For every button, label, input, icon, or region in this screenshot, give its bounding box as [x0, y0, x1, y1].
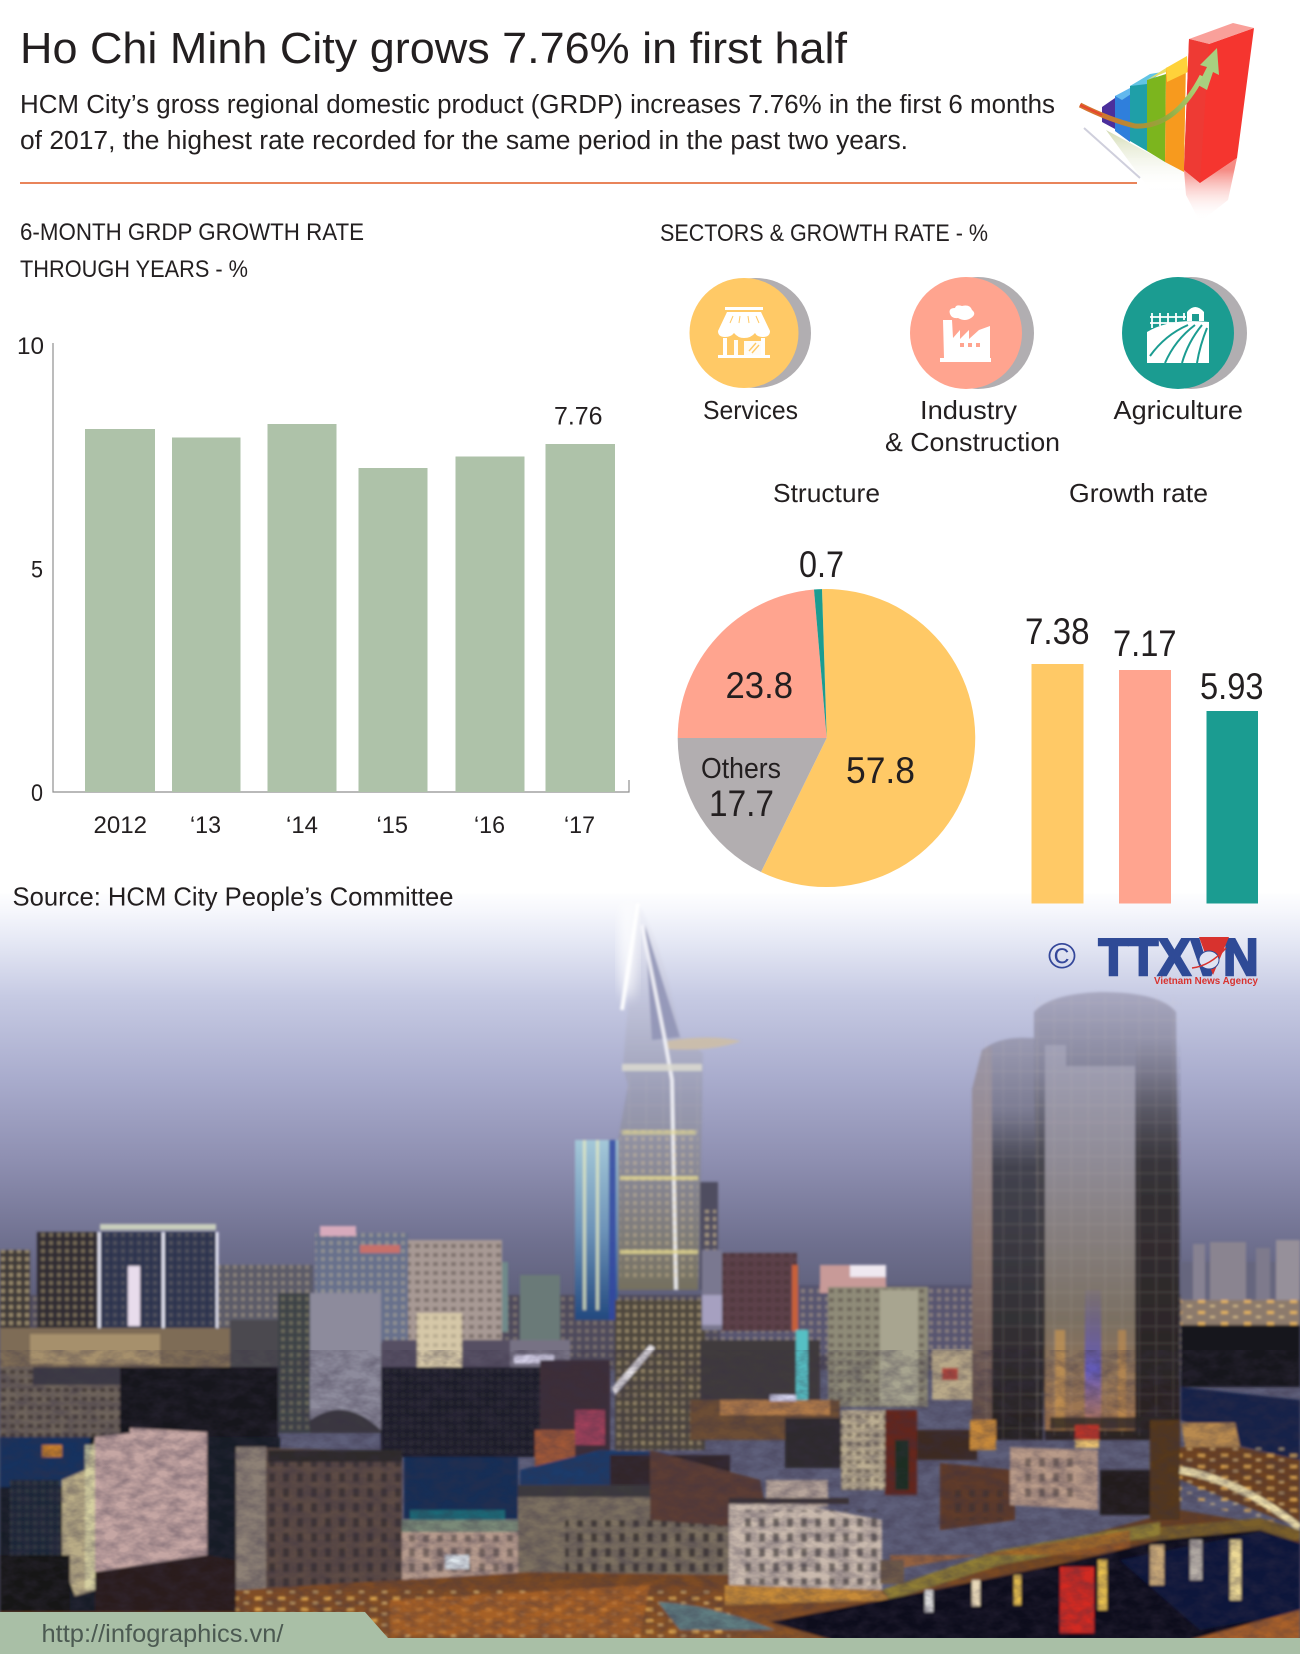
- growth values: [1025, 611, 1264, 707]
- footer url: http://infographics.vn/: [42, 1620, 284, 1648]
- white fade over photo top edge: [0, 880, 1300, 894]
- sector: agriculture: [1114, 277, 1247, 425]
- label: Industry: [920, 395, 1017, 425]
- pie labels: 57.8: [846, 750, 915, 791]
- intro text: of 2017, the highest rate recorded for the same period in the past two years.: [20, 127, 908, 155]
- pie labels: [701, 544, 915, 824]
- label: [885, 395, 1060, 457]
- logo: TTXVN copyright: Vietnam News Agency: [1154, 975, 1258, 987]
- x axis labels: ‘14: [286, 812, 318, 839]
- photo grain texture: [0, 1350, 1300, 1640]
- label: Agriculture: [1114, 395, 1243, 425]
- pie labels: Others: [701, 753, 781, 785]
- heading: GRDP growth rate: THROUGH YEARS - %: [20, 256, 248, 283]
- pie labels: 23.8: [726, 665, 793, 706]
- x axis labels: ‘13: [190, 812, 221, 839]
- x axis labels: ‘17: [564, 812, 595, 839]
- icon: shop: [690, 278, 811, 388]
- y axis labels: 10: [17, 333, 44, 360]
- pie labels: 17.7: [709, 783, 774, 824]
- back row left: [0, 1224, 560, 1370]
- x axis labels: [94, 812, 595, 839]
- x axis labels: ‘16: [474, 812, 505, 839]
- photo: Ho Chi Minh City skyline: [0, 885, 1300, 1645]
- y axis labels: 5: [31, 556, 43, 584]
- sector: industry and construction: [885, 277, 1060, 457]
- chart axes: [53, 343, 629, 792]
- heading: sectors and growth rate: SECTORS & GROWTH RATE - %: [660, 220, 988, 247]
- y axis labels: 0: [31, 780, 43, 807]
- subheading: growth rate: Growth rate: [1069, 478, 1208, 508]
- logo: TTXVN copyright: ©: [1048, 935, 1076, 976]
- bars: [85, 424, 615, 792]
- front-middle blocks: [0, 1250, 996, 1495]
- heading: GRDP growth rate: 6-MONTH GRDP GROWTH RATE: [20, 219, 364, 246]
- value label: 7.76: [554, 402, 602, 430]
- heading: GRDP growth rate: [20, 219, 364, 283]
- growth values: 7.38: [1025, 611, 1090, 652]
- icon: 3D rising bar chart: [1080, 23, 1254, 222]
- logo: TTXVN copyright: TTXVN: [1098, 929, 1258, 987]
- sector: services: [690, 278, 811, 425]
- intro text: HCM City’s gross regional domestic product (GRDP) increases 7.76% in the first 6 months: [20, 91, 1055, 119]
- x axis labels: ‘15: [376, 812, 408, 839]
- far city haze: [0, 1240, 1300, 1460]
- icon: farm: [1122, 277, 1247, 389]
- intro text: [20, 91, 1055, 155]
- bar chart: GRDP growth by year: [17, 333, 629, 839]
- source note: Source: HCM City People’s Committee: [12, 882, 454, 912]
- y axis labels: [17, 333, 44, 807]
- label: Services: [703, 395, 798, 425]
- label: & Construction: [885, 427, 1060, 457]
- lower city: [0, 1420, 1300, 1642]
- header divider: [20, 182, 1137, 184]
- spire glare: [620, 900, 636, 1000]
- blue glass tower: [575, 1140, 618, 1320]
- pie labels: 0.7: [799, 544, 844, 585]
- bar chart: sector growth rate: [1025, 611, 1264, 904]
- Bitexco tower: [618, 903, 741, 1290]
- twin towers: [972, 992, 1180, 1440]
- pie chart: structure: [678, 544, 975, 887]
- growth values: 5.93: [1200, 666, 1264, 707]
- icon: factory: [910, 277, 1034, 389]
- subheading: structure: Structure: [773, 478, 880, 508]
- title: Ho Chi Minh City grows 7.76% in first half: [20, 24, 848, 73]
- footer band: [0, 1612, 1300, 1654]
- growth values: 7.17: [1113, 623, 1176, 664]
- x axis labels: 2012: [94, 812, 147, 839]
- river with reflections: [658, 1530, 1300, 1640]
